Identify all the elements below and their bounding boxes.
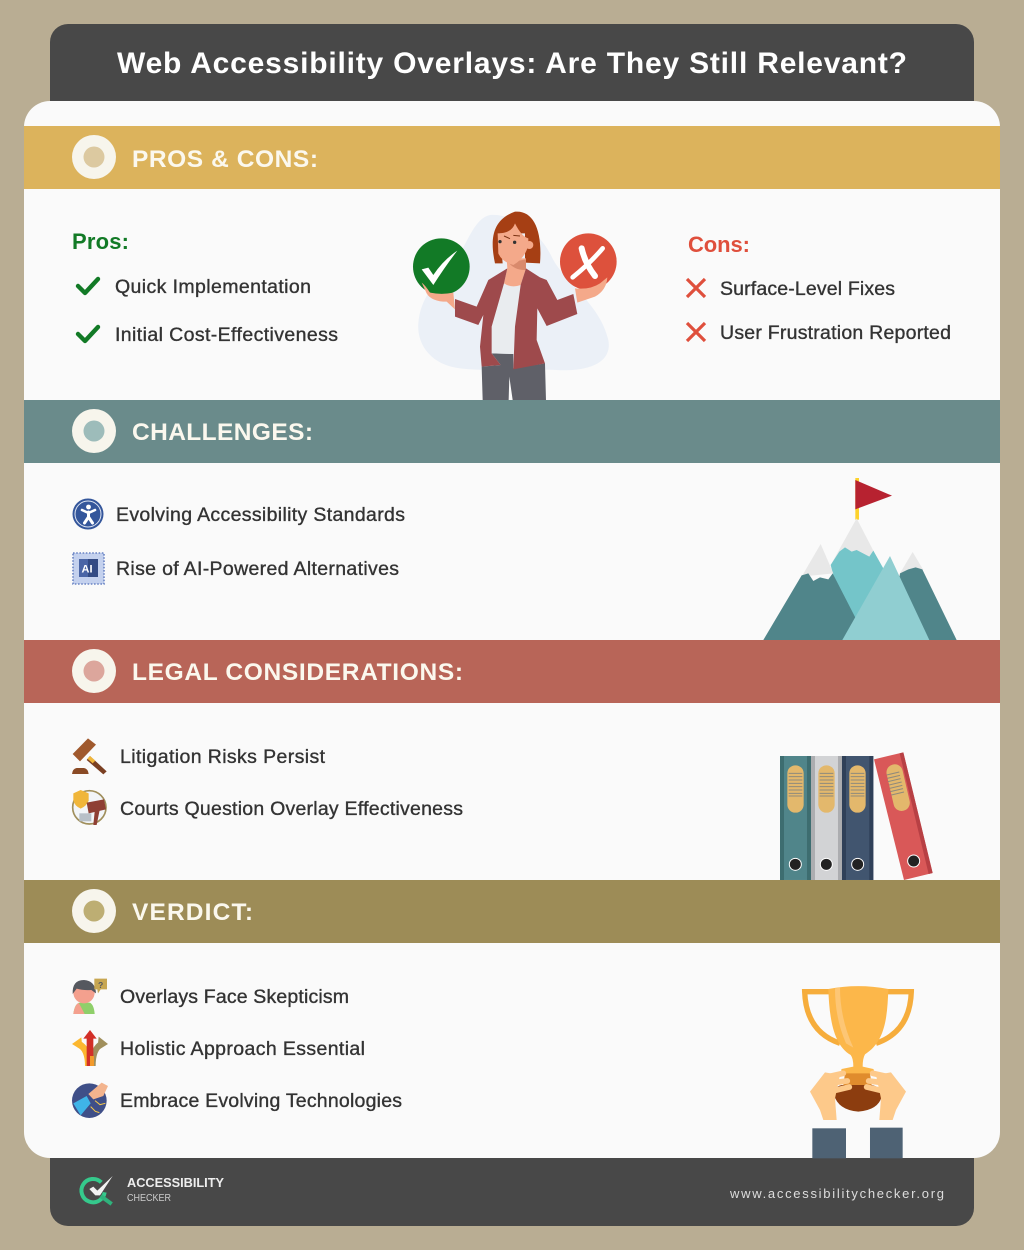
- cons list: [687, 232, 951, 344]
- pros list: [72, 229, 338, 346]
- text: embrace technologies: Embrace Evolving Technologies: [120, 1090, 402, 1112]
- text: overlays skepticism: Overlays Face Skepticism: [120, 986, 349, 1008]
- illustration: trophy held by hands: [805, 986, 911, 1158]
- header bar: [50, 24, 974, 144]
- text: AI alternatives: Rise of AI-Powered Alternatives: [116, 558, 399, 580]
- section: challenges: [24, 400, 1000, 640]
- cons list: Surface-Level Fixes: [720, 278, 895, 300]
- footer logo: [81, 1176, 225, 1204]
- text: evolving standards: Evolving Accessibility Standards: [116, 504, 405, 526]
- text: courts question: Courts Question Overlay Effectiveness: [120, 798, 463, 820]
- footer logo: ACCESSIBILITY: [127, 1176, 225, 1190]
- icon: skeptical person: ?: [98, 980, 103, 990]
- text: holistic approach: Holistic Approach Essential: [120, 1038, 365, 1060]
- icon: evolving technology: [72, 1083, 108, 1118]
- section: verdict: [24, 880, 1000, 1158]
- icon: diverging arrows: [72, 1030, 108, 1066]
- icon: AI chip: [73, 553, 104, 584]
- text: litigation risks: Litigation Risks Persist: [120, 746, 326, 768]
- footer bar: [50, 1120, 974, 1226]
- pros list: Pros:: [72, 229, 129, 254]
- illustration: woman weighing check and cross: [413, 212, 617, 400]
- band: verdict: [24, 880, 1000, 943]
- section: legal considerations: [24, 640, 1000, 880]
- icon: AI chip: AI: [82, 564, 92, 576]
- icon: gavel: [72, 738, 107, 774]
- band: pros and cons: PROS & CONS:: [132, 146, 318, 173]
- illustration: binders: [780, 752, 933, 880]
- icon: skeptical person: [73, 979, 107, 1014]
- band: verdict: VERDICT:: [132, 899, 253, 926]
- title: Web Accessibility Overlays: Are They Still Relevant?: [117, 47, 907, 80]
- band: challenges: CHALLENGES:: [132, 419, 313, 446]
- icon: accessibility person: [72, 498, 104, 530]
- pros list: Initial Cost-Effectiveness: [115, 324, 338, 346]
- section: pros and cons: [24, 126, 1000, 400]
- band: legal considerations: LEGAL CONSIDERATIONS:: [132, 659, 463, 686]
- illustration: mountains with flag: [763, 478, 957, 640]
- band: pros and cons: [24, 126, 1000, 189]
- cons list: Cons:: [688, 232, 750, 257]
- website url: www.accessibilitychecker.org: [729, 1186, 944, 1201]
- band: challenges: [24, 400, 1000, 463]
- cons list: User Frustration Reported: [720, 322, 951, 344]
- pros list: Quick Implementation: [115, 276, 311, 298]
- icon: court document and shield: [73, 790, 106, 825]
- footer logo: CHECKER: [127, 1193, 171, 1204]
- band: legal considerations: [24, 640, 1000, 703]
